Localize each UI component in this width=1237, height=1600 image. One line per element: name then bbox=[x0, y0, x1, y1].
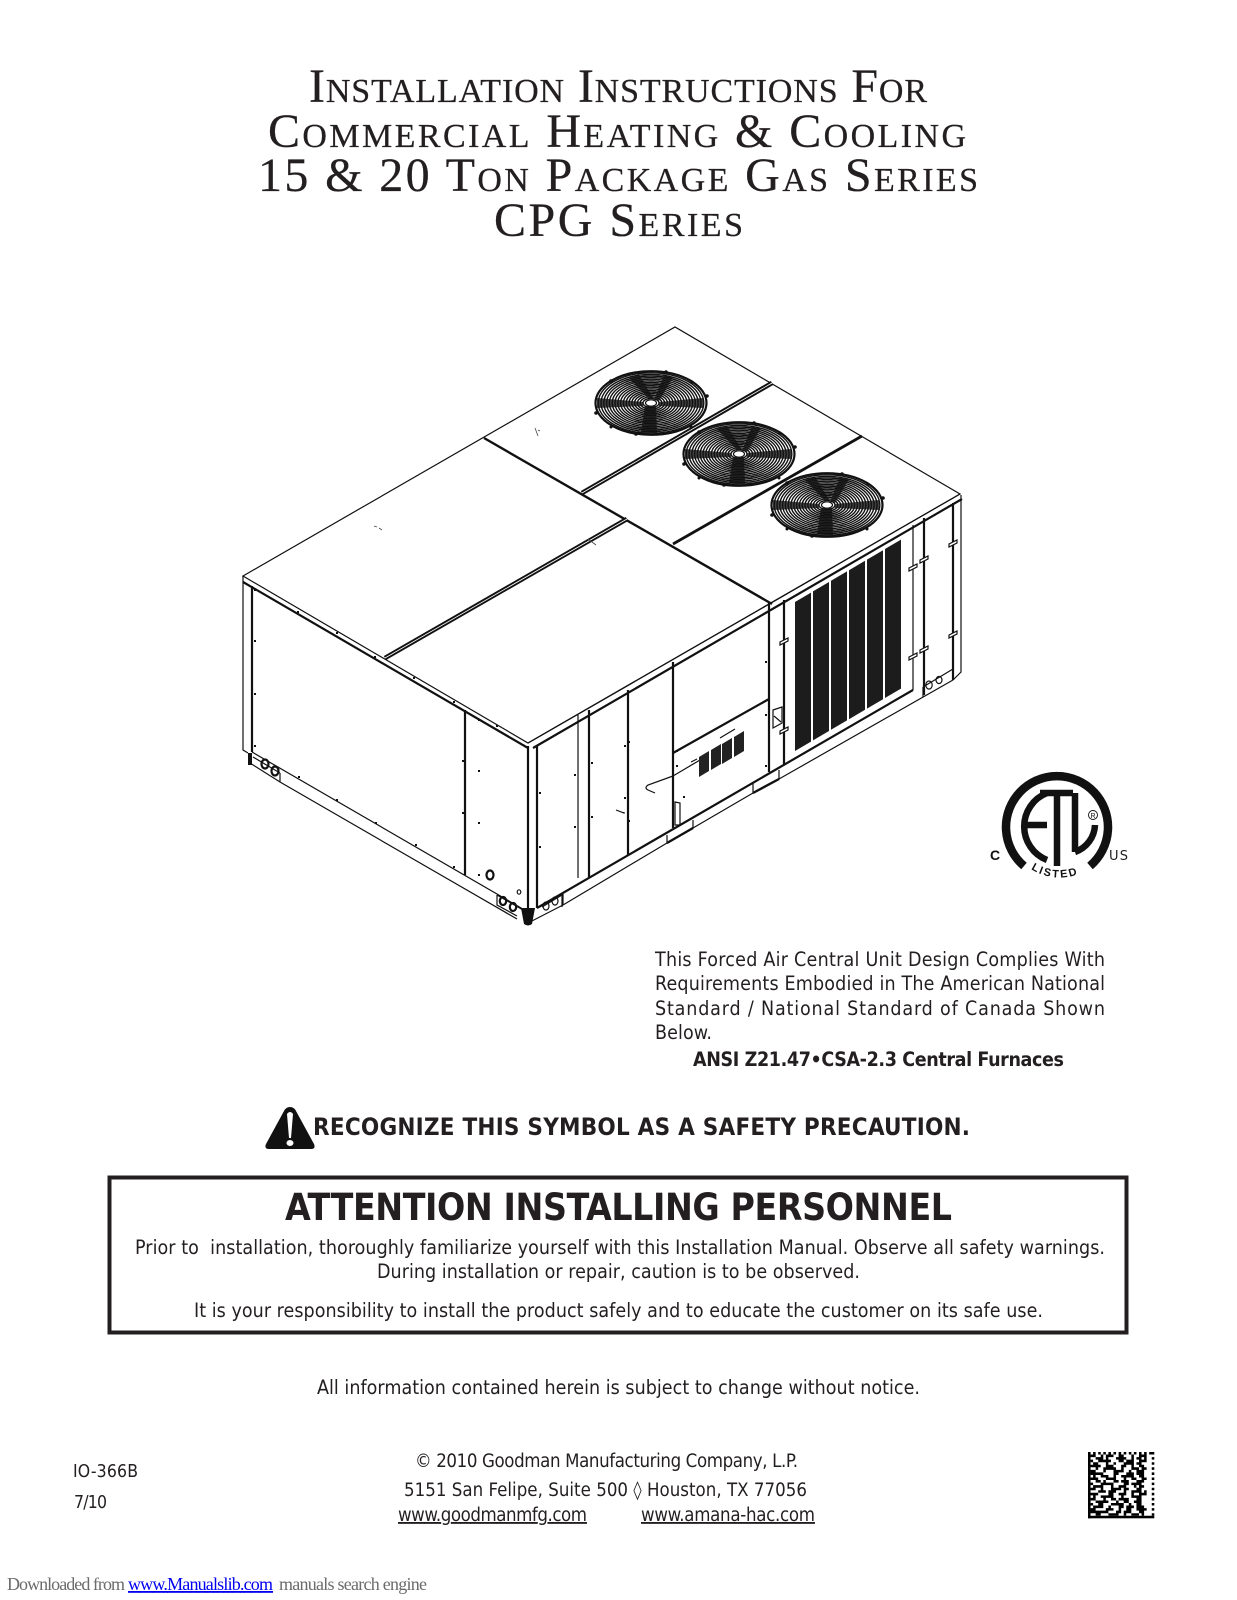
panel: attention installing personnel: Prior to installation, thoroughly familiarize yourself with this Installation Manual. Observe all safety warnings. bbox=[135, 1236, 1105, 1259]
panel: attention installing personnel: During installation or repair, caution is to be observed. bbox=[377, 1260, 860, 1283]
compliance statement: Below. bbox=[655, 1021, 712, 1044]
data matrix code bbox=[1088, 1452, 1154, 1518]
title: CPG Series bbox=[494, 194, 743, 247]
document number: 7/10 bbox=[74, 1493, 107, 1513]
panel: attention installing personnel: ATTENTION INSTALLING PERSONNEL bbox=[285, 1186, 952, 1229]
company address: www.amana-hac.com bbox=[641, 1505, 815, 1526]
source footer: Downloaded from bbox=[7, 1574, 125, 1594]
left side face bbox=[243, 576, 535, 926]
small vent louvers bbox=[699, 731, 744, 777]
title: Installation Instructions For bbox=[309, 60, 927, 113]
fan 1 bbox=[594, 370, 709, 436]
company address: © 2010 Goodman Manufacturing Company, L.P. bbox=[415, 1451, 798, 1472]
compliance statement: Requirements Embodied in The American National bbox=[655, 972, 1105, 995]
roof panels bbox=[243, 327, 960, 743]
compliance statement: Standard / National Standard of Canada Shown bbox=[655, 997, 1105, 1020]
ETL listed mark: LISTED bbox=[1032, 862, 1076, 878]
source footer: www.Manualslib.com bbox=[128, 1574, 273, 1594]
company address: www.goodmanmfg.com bbox=[398, 1505, 587, 1526]
fan 3 bbox=[770, 472, 885, 538]
compliance statement: ANSI Z21.47•CSA-2.3 Central Furnaces bbox=[693, 1048, 1064, 1071]
compliance statement: This Forced Air Central Unit Design Complies With bbox=[654, 948, 1105, 971]
title: Commercial Heating & Cooling bbox=[268, 105, 966, 158]
document number bbox=[73, 1462, 138, 1513]
source footer bbox=[7, 1574, 427, 1594]
front face bbox=[528, 494, 962, 923]
document number: IO-366B bbox=[73, 1462, 138, 1482]
company address bbox=[398, 1451, 815, 1526]
condenser louvers bbox=[795, 540, 901, 751]
notice: All information contained herein is subject to change without notice. bbox=[317, 1376, 920, 1399]
panel clips bbox=[780, 540, 957, 734]
illustration: packaged rooftop unit bbox=[243, 327, 962, 926]
safety symbol line bbox=[265, 1107, 970, 1149]
title: 15 & 20 Ton Package Gas Series bbox=[258, 149, 978, 202]
icon: warning triangle bbox=[265, 1107, 315, 1149]
company address: 5151 San Felipe, Suite 500 ◊ Houston, TX 77056 bbox=[404, 1480, 807, 1501]
compliance statement bbox=[654, 948, 1105, 1071]
panel: attention installing personnel: It is your responsibility to install the product safely and to educate the customer on its safe use. bbox=[194, 1299, 1043, 1322]
safety symbol line: RECOGNIZE THIS SYMBOL AS A SAFETY PRECAUTION. bbox=[313, 1113, 970, 1141]
ETL listed mark: R bbox=[1090, 813, 1096, 820]
ETL listed mark bbox=[990, 772, 1128, 878]
fan 2 bbox=[682, 421, 797, 487]
source footer: manuals search engine bbox=[279, 1574, 427, 1594]
ETL listed mark: C bbox=[990, 847, 1000, 863]
panel: attention installing personnel bbox=[110, 1178, 1126, 1332]
ETL listed mark: US bbox=[1109, 849, 1128, 864]
title bbox=[258, 60, 978, 247]
